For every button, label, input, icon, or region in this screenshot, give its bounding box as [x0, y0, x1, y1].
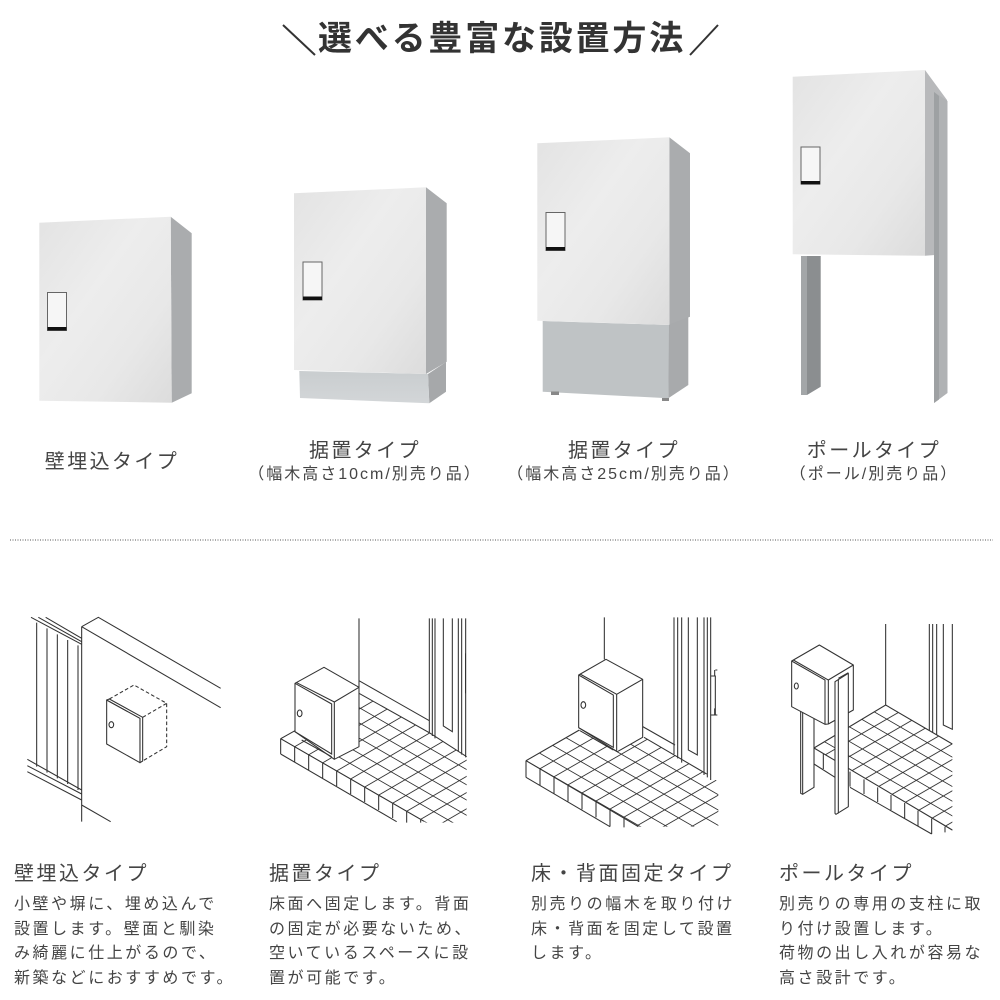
caption: standing type 25cm: （幅木高さ25cm/別売り品）	[507, 466, 741, 483]
decorative slash: title right	[690, 25, 718, 55]
text block: pole type: ポールタイプ	[779, 863, 914, 885]
text block: pole type: 別売りの専用の支柱に取 り付け設置します。 荷物の出し入れが容易な 高さ設計です。	[779, 896, 983, 986]
text block: standing: 床面へ固定します。背面 の固定が必要ないため、 空いているスペースに設 置が可能です。	[269, 896, 473, 986]
divider	[10, 539, 993, 541]
caption: standing type 10cm: （幅木高さ10cm/別売り品）	[248, 466, 482, 483]
product: standing box with 25cm base	[537, 137, 690, 401]
diagram: wall-embedded installation	[27, 617, 221, 822]
product: wall-embedded box	[39, 217, 192, 403]
caption: pole type: （ポール/別売り品）	[790, 466, 958, 483]
text block: wall-embedded: 壁埋込タイプ	[14, 863, 149, 885]
diagram: floor and back fixed installation	[526, 617, 718, 827]
diagram: pole mounted installation	[792, 624, 952, 834]
caption: pole type: ポールタイプ	[807, 440, 941, 462]
caption: standing type 10cm	[248, 440, 482, 483]
decorative slash: title left	[283, 25, 315, 55]
product: standing box with 10cm base	[294, 187, 447, 403]
text block: floor and back fixed: 別売りの幅木を取り付け 床・背面を固定して設置 します。	[531, 896, 735, 962]
text block: wall-embedded: 小壁や塀に、埋め込んで 設置します。壁面と馴染 み綺麗に仕上がるので、 新築などにおすすめです。	[14, 896, 235, 986]
caption: wall-embedded type: 壁埋込タイプ	[45, 451, 179, 473]
product: pole mounted box	[793, 70, 948, 403]
text block: floor and back fixed	[531, 863, 735, 962]
caption: standing type 25cm	[507, 440, 741, 483]
title: 選べる豊富な設置方法	[318, 20, 686, 58]
diagram: floor-standing installation	[281, 618, 467, 823]
caption: pole type	[790, 440, 958, 483]
caption: standing type 25cm: 据置タイプ	[568, 440, 680, 462]
text block: floor and back fixed: 床・背面固定タイプ	[531, 863, 734, 885]
caption: standing type 10cm: 据置タイプ	[309, 440, 421, 462]
text block: standing: 据置タイプ	[269, 863, 382, 885]
